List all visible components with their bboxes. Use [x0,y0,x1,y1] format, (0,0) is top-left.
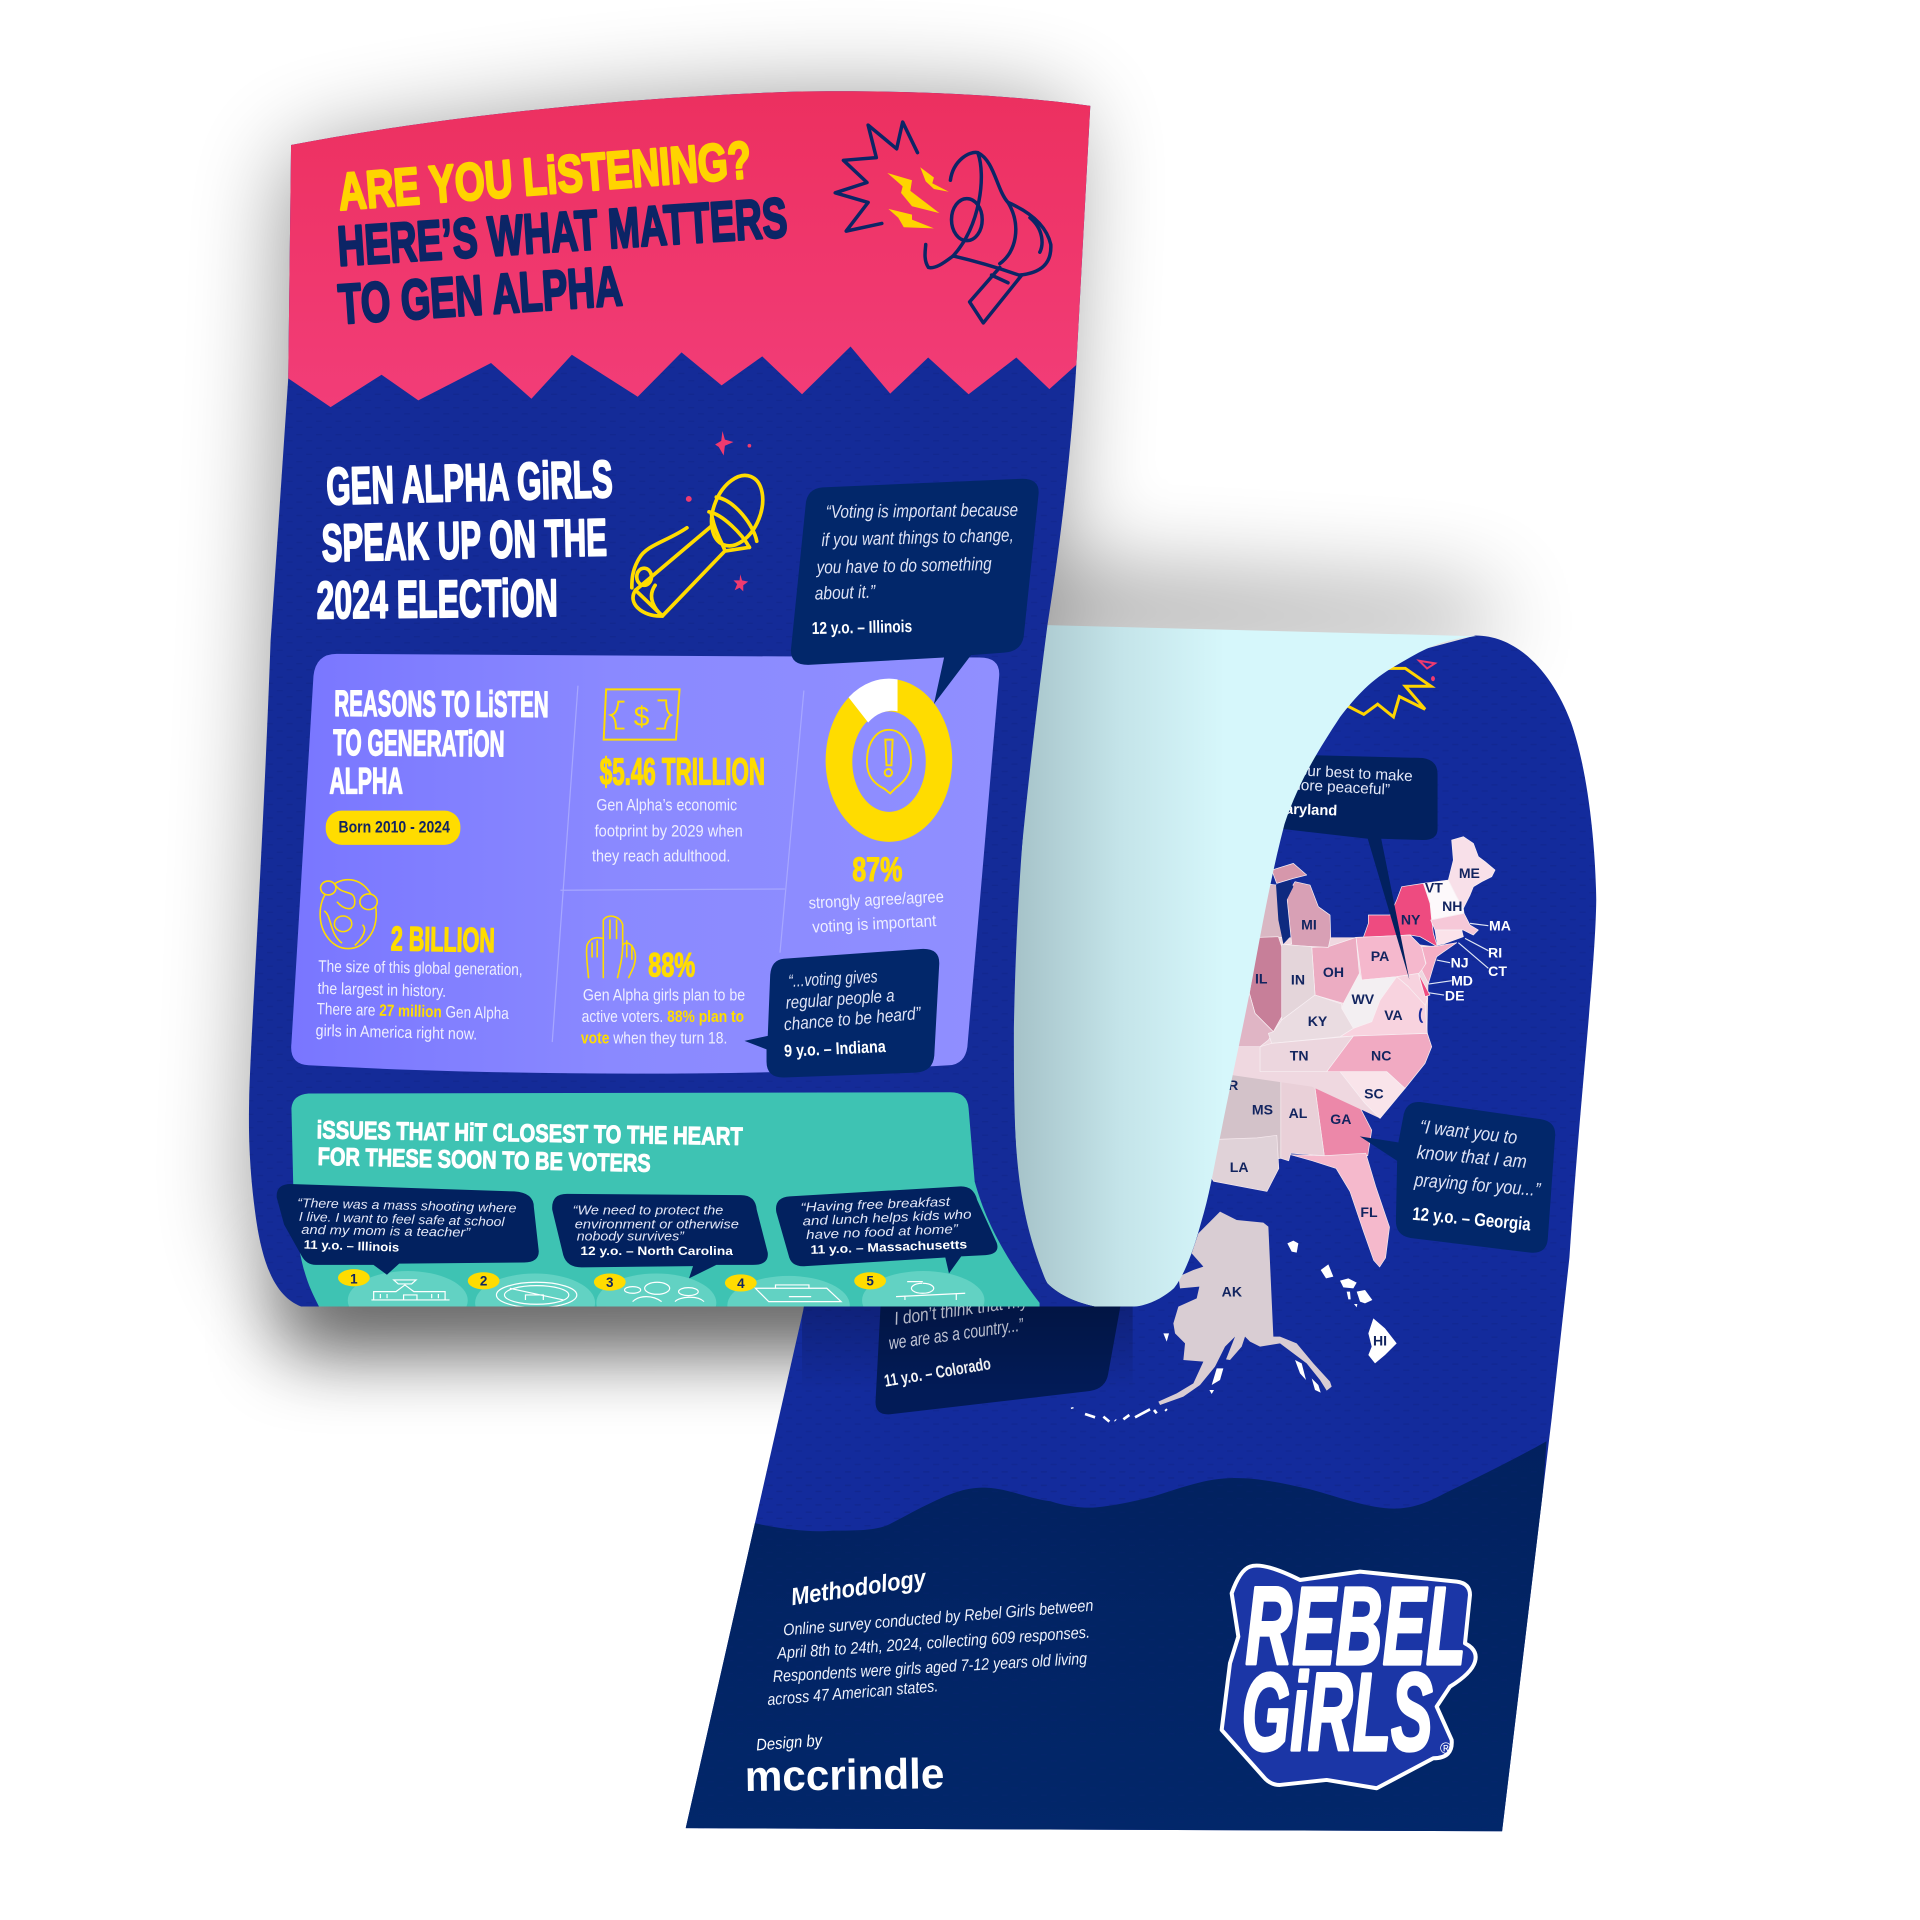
design credit: Design by [755,1730,824,1755]
state labels: GA [1330,1111,1351,1127]
issue icons: 5 [866,1274,874,1289]
state labels: AL [1289,1105,1308,1121]
callout: Indiana: regular people a [785,985,895,1013]
state labels: AR [1218,1077,1238,1093]
stat: 87 percent donut [808,679,952,937]
callout: environment: “We need to protect the [573,1203,723,1218]
icon: microphone [632,468,772,616]
number badges [338,1269,886,1291]
stat: 5.46 trillion: $5.46 TRILLION [600,752,765,794]
methodology text [767,1596,1094,1709]
header banner [282,73,1102,407]
stat: 5.46 trillion: they reach adulthood. [592,846,730,865]
southern states [1190,1003,1389,1267]
panel: back page [673,624,1616,1849]
stat: 2 billion: girls in America right now. [315,1021,477,1044]
callout: Indiana [744,949,939,1078]
callout: Colorado: I don’t think that my [893,1289,1031,1329]
state labels: NY [1401,911,1421,927]
callout: Maryland [1196,753,1438,980]
issue icons: 2 [480,1274,487,1289]
state labels: MS [1252,1101,1273,1117]
icon: banknote: $ [634,701,650,732]
heading: speak up [317,460,612,620]
title: HERE’S WHAT MATTERS [335,186,789,278]
callout: Georgia [1360,1102,1555,1253]
drop shadow [251,97,1488,1353]
callout: free breakfast: have no food at home” [806,1221,959,1242]
state labels: VA [1384,1007,1403,1023]
badge: born: Born 2010 - 2024 [338,818,451,837]
state labels: DE [1445,987,1464,1003]
callout: Colorado: we are as a country...” [887,1314,1025,1353]
shadow cast on back page [802,1306,1133,1378]
title: TO GEN ALPHA [336,254,624,336]
stars [686,431,751,591]
callout: environment: environment or otherwise [575,1217,739,1232]
page background [239,86,1096,1310]
callout: safe at school: 11 y.o. – Illinois [304,1237,400,1255]
title [336,140,787,324]
Alaska and Hawaii [1072,1212,1397,1422]
state labels: OH [1323,964,1344,980]
methodology text: across 47 American states. [767,1676,939,1709]
stat: 5.46 trillion: Gen Alpha’s economic [596,796,737,815]
eastern states [1220,837,1495,1118]
heading: reasons: REASONS TO LiSTEN [334,683,549,725]
callout: environment: 12 y.o. – North Carolina [580,1244,733,1258]
callout: Georgia: praying for you...” [1413,1170,1542,1201]
callout: Maryland: “We should do our best to make [1196,757,1413,785]
methodology text: April 8th to 24th, 2024, collecting 609 responses. [776,1623,1091,1663]
state labels: HI [1373,1333,1387,1349]
state labels [1218,865,1511,1349]
heading: speak up: 2024 ELECTiON [316,569,558,630]
state labels: IN [1291,971,1305,987]
stat: 5.46 trillion: footprint by 2029 when [595,821,743,840]
callout: Colorado [876,1286,1124,1414]
icon: raised hands [587,916,635,978]
logo: Rebel Girls: REBEL [1245,1565,1466,1688]
panel: reasons to listen [291,654,999,1074]
callout: Indiana: chance to be heard” [783,1003,922,1034]
state labels: KY [1308,1013,1328,1029]
logo: Rebel Girls: ® [1440,1740,1452,1757]
stat: 2 billion: 2 BILLION [390,920,495,960]
heading: issues [316,1116,743,1178]
callout: Georgia: 12 y.o. – Georgia [1411,1203,1532,1235]
state labels: PA [1371,948,1389,964]
stat: 88 percent: 88% [648,947,695,985]
issue icons: 3 [606,1275,614,1290]
callout: Illinois voting [791,479,1039,704]
state labels: RI [1488,945,1502,961]
state labels: NJ [1451,954,1469,970]
callout: Illinois voting: 12 y.o. – Illinois [812,616,912,638]
stat: 87 percent donut: voting is important [812,911,937,937]
icon: alert bubble [867,730,911,793]
stat: 2 billion: There are 27 million Gen Alpha [316,999,510,1023]
callout: free breakfast: and lunch helps kids who [802,1206,972,1228]
state labels: AK [1222,1284,1243,1300]
callout: safe at school: and my mom is a teacher” [301,1222,471,1240]
state labels: VT [1425,880,1443,896]
issue icons [338,1269,984,1335]
starburst on back page [1344,661,1435,717]
state labels: LA [1230,1159,1249,1175]
callout: free breakfast [776,1186,997,1273]
callout: Indiana: 9 y.o. – Indiana [784,1036,887,1061]
state labels: ME [1459,865,1480,881]
callout: Georgia: “I want you to [1419,1117,1518,1149]
callout: free breakfast: 11 y.o. – Massachusetts [810,1237,968,1257]
callout: Maryland: 10 y.o. – Maryland [1212,799,1338,820]
callout: environment: nobody survives” [577,1228,685,1243]
state labels: MD [1451,973,1473,989]
stat: 88 percent: vote when they turn 18. [581,1028,727,1047]
callout: Illinois voting: if you want things to change, [821,524,1014,550]
stat: 88 percent: Gen Alpha girls plan to be [583,985,745,1004]
title: ARE YOU LiSTENING? [336,131,753,222]
heading: issues: iSSUES THAT HiT CLOSEST TO THE HEART [316,1116,743,1151]
heading: reasons: TO GENERATiON [333,722,505,764]
state labels: FL [1360,1204,1378,1220]
icon: banknote [604,689,680,740]
inner curl of page [1014,625,1476,1307]
heading: issues: FOR THESE SOON TO BE VOTERS [317,1143,651,1178]
callout: environment [552,1194,768,1278]
stat: 88 percent: active voters. 88% plan to [582,1007,744,1026]
icon: megaphone [835,122,1051,323]
state labels: NH [1442,898,1462,914]
callout: Colorado: 11 y.o. – Colorado [883,1353,992,1391]
state labels: NC [1371,1047,1391,1063]
badge: born [326,811,460,845]
heading: reasons [330,689,548,794]
state labels: MA [1489,918,1511,934]
methodology text: Online survey conducted by Rebel Girls between [782,1596,1094,1640]
stat: 2 billion: the largest in history. [317,979,446,1001]
logo: Rebel Girls: GiRLS [1242,1651,1433,1774]
stat: 2 billion [315,880,523,1044]
callout: Indiana: “...voting gives [788,966,878,991]
callout: safe at school: “There was a mass shooting where [297,1195,517,1215]
callout: Georgia: know that I am [1416,1142,1528,1173]
stat: 87 percent donut: strongly agree/agree [808,887,944,913]
icon: globe [320,880,377,949]
state labels: IL [1255,970,1268,986]
stat: 88 percent [581,916,745,1047]
callout: Maryland: the world more peaceful” [1221,773,1390,799]
state labels: WV [1352,991,1375,1007]
panel: issues [277,1092,1040,1335]
design credit: mccrindle [744,1750,945,1801]
state labels: SC [1364,1085,1384,1101]
stat: 87 percent donut: 87% [852,851,902,889]
stat: 2 billion: The size of this global generation, [318,957,523,979]
panel: front page [239,73,1102,1335]
heading: methodology: Methodology [789,1565,929,1611]
issue icons: 4 [737,1276,745,1291]
line icons [371,1280,965,1308]
stat: 5.46 trillion [592,689,765,865]
issue icons: 1 [350,1271,358,1286]
footer wave [673,1441,1547,1837]
map pointers [1428,923,1488,995]
logo: Rebel Girls [1222,1565,1476,1788]
callout: safe at school: I live. I want to feel safe at school [299,1209,506,1229]
state labels: CT [1488,963,1507,979]
heading: reasons: ALPHA [329,760,403,801]
state labels: TN [1290,1047,1309,1063]
methodology [767,1565,1094,1709]
US map [1072,837,1511,1422]
methodology text: Respondents were girls aged 7-12 years old living [772,1649,1088,1686]
callout: Illinois voting: you have to do something [815,553,993,578]
callout: Illinois voting: about it.” [814,581,876,604]
heading: speak up: GEN ALPHA GiRLS [325,450,613,516]
state labels: MI [1301,916,1317,932]
heading: speak up: SPEAK UP ON THE [321,508,608,573]
callout: safe at school [277,1184,539,1275]
callout: free breakfast: “Having free breakfast [800,1194,952,1215]
callout: Illinois voting: “Voting is important because [826,499,1018,522]
